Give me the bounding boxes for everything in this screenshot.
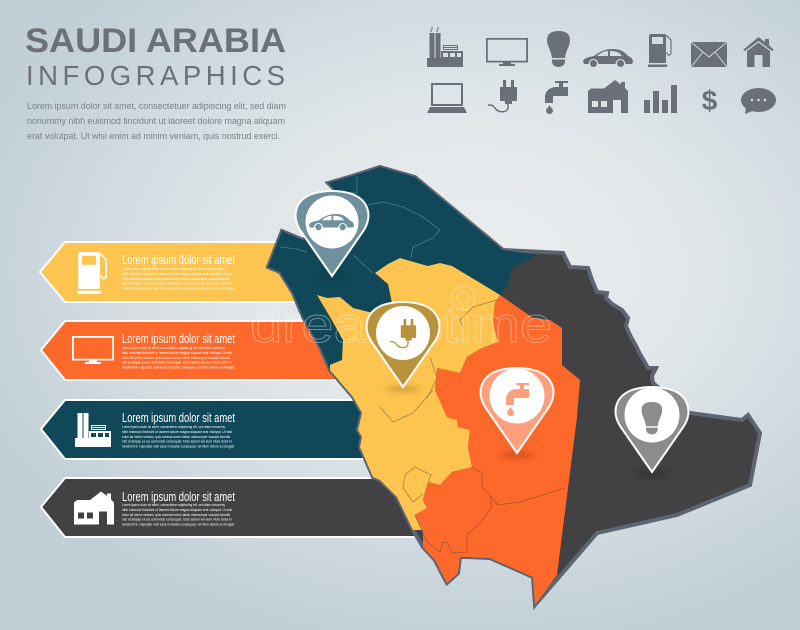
banner body text: hendrerit in vulputate velit esse molestie consequat, vel illum dolore eu feugiat (122, 444, 235, 448)
title: Saudi Arabia Infographics: SAUDI ARABIA (25, 22, 286, 60)
intro text block: Lorem ipsum dolor sit amet, consectetuer adipiscing elit, sed diam (27, 101, 286, 111)
icon: house white (74, 492, 114, 524)
panel: teal banner (41, 400, 390, 459)
map of Saudi Arabia (268, 167, 760, 605)
intro text block: nonummy nibh euismod tincidunt ut laoreet dolore magna aliquam (27, 116, 285, 126)
icon: light bulb (547, 31, 570, 67)
banner body text: nisl ut aliquip ex ea commodo consequat. Duis autem vel eum iriure dolor in (122, 282, 232, 286)
map region: central yellow (317, 258, 500, 530)
banner body text: Lorem ipsum dolor sit amet, consectetuer adipiscing elit, sed diam nonummy (122, 425, 225, 429)
icon set (427, 27, 776, 116)
banner body text: nibh euismod tincidunt ut laoreet dolore magna aliquam erat volutpat. Ut wisi (122, 508, 232, 512)
banner body text: Lorem ipsum dolor sit amet, consectetuer adipiscing elit, sed diam nonummy (122, 503, 225, 507)
icon: dollar sign: $ (702, 85, 718, 116)
banner heading: Lorem ipsum dolor sit amet (122, 253, 235, 267)
icon: tap in pin (506, 383, 529, 416)
banner body text: enim ad minim veniam, quis nostrud exerci tation ullamcorper suscipit lobortis (122, 513, 230, 517)
banner body text (122, 267, 235, 290)
banner body text: hendrerit in vulputate velit esse molestie consequat, vel illum dolore eu feugiat (122, 366, 235, 370)
banner body text: nisl ut aliquip ex ea commodo consequat. Duis autem vel eum iriure dolor in (122, 440, 232, 444)
map region: east dark (268, 167, 760, 605)
banner body text: Lorem ipsum dolor sit amet, consectetuer adipiscing elit, sed diam nonummy (122, 267, 225, 271)
banner body text (122, 346, 235, 370)
banner body text (122, 425, 235, 448)
icon: fuel pump (648, 34, 671, 67)
banner body text: enim ad minim veniam, quis nostrud exerci tation ullamcorper suscipit lobortis (122, 435, 230, 439)
icon: speech bubble (741, 88, 776, 114)
banner heading: Lorem ipsum dolor sit amet (122, 490, 235, 504)
map pin: water tap (481, 368, 553, 458)
intro text block (27, 101, 286, 141)
banner body text: enim ad minim veniam, quis nostrud exerci tation ullamcorper suscipit lobortis (122, 277, 230, 281)
icon: fuel pump white (77, 252, 106, 294)
map pin: light bulb (616, 387, 688, 477)
banner heading: Lorem ipsum dolor sit amet (122, 411, 235, 425)
panel: dark banner (41, 478, 440, 537)
banner body text: enim ad minim veniam, quis nostrud exerci tation ullamcorper suscipit lobortis (122, 356, 230, 360)
icon: plug in pin (390, 319, 416, 348)
map pin: car (296, 191, 368, 281)
map region: south orange (415, 295, 580, 605)
map region: north teal (268, 167, 537, 370)
icon: plug (488, 80, 517, 112)
banner heading: Lorem ipsum dolor sit amet (122, 332, 235, 346)
banner body text: Lorem ipsum dolor sit amet, consectetuer adipiscing elit, sed diam nonummy (122, 346, 225, 350)
icon: house (588, 80, 628, 113)
icon: laptop (427, 83, 467, 113)
panel: orange banner (41, 321, 360, 380)
icon: factory (427, 27, 463, 67)
icon: bar chart (644, 85, 677, 113)
icon: television (486, 38, 528, 66)
banner body text: nibh euismod tincidunt ut laoreet dolore magna aliquam erat volutpat. Ut wisi (122, 430, 232, 434)
banner body text: nisl ut aliquip ex ea commodo consequat. Duis autem vel eum iriure dolor in (122, 360, 232, 364)
map pin: plug (367, 302, 439, 392)
panel: yellow banner (40, 242, 320, 302)
icon: car in pin (309, 214, 354, 230)
banner body text: nisl ut aliquip ex ea commodo consequat. Duis autem vel eum iriure dolor in (122, 518, 232, 522)
title: Saudi Arabia Infographics: INFOGRAPHICS (26, 60, 285, 91)
map: province borders (280, 177, 565, 553)
intro text block: erat volutpat. Ut wisi enim ad minim veniam, quis nostrud exerci. (27, 131, 280, 141)
watermark: dreamstime (250, 297, 552, 353)
icon: home (743, 37, 774, 67)
title: Saudi Arabia Infographics (25, 22, 286, 91)
banner body text: nibh euismod tincidunt ut laoreet dolore magna aliquam erat volutpat. Ut wisi (122, 272, 232, 276)
icon: bulb in pin (642, 402, 662, 434)
icon: envelope (691, 42, 727, 67)
banner body text (122, 503, 235, 526)
icon: car (583, 49, 633, 67)
banner body text: nibh euismod tincidunt ut laoreet dolore magna aliquam erat volutpat. Ut wisi (122, 351, 232, 355)
icon: factory white (75, 413, 111, 447)
icon: water tap (545, 81, 568, 114)
banner body text: hendrerit in vulputate velit esse molestie consequat, vel illum dolore eu feugiat (122, 522, 235, 526)
icon: television white (72, 336, 114, 364)
banner body text: hendrerit in vulputate velit esse molestie consequat, vel illum dolore eu feugiat (122, 286, 235, 290)
